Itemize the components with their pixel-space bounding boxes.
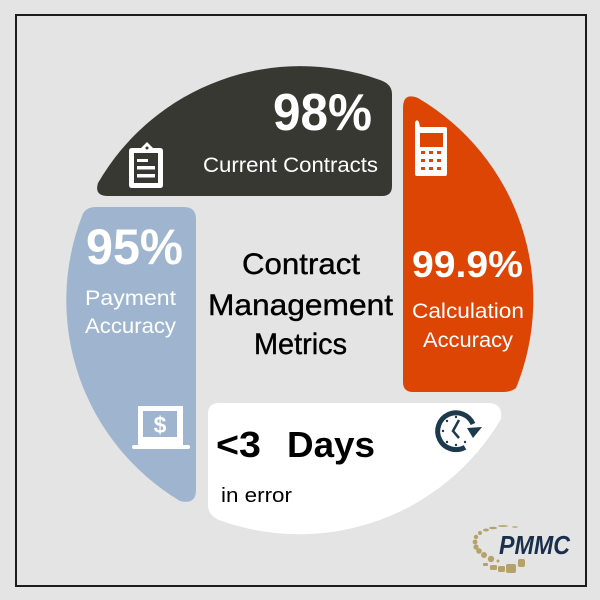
logo: PMMC: PMMC [499, 530, 571, 560]
panel: days in error [208, 403, 501, 534]
title [208, 248, 394, 361]
stat: less than 3 days: <3 [216, 424, 261, 465]
label: accuracy: Accuracy [423, 329, 514, 352]
stat: 99.9%: 99.9% [412, 244, 523, 285]
icon: mobile phone [415, 120, 447, 176]
stat: 98%: 98% [273, 84, 372, 142]
panel: payment accuracy [66, 207, 196, 502]
title: Contract [242, 248, 361, 281]
icon: laptop with dollar [132, 406, 190, 449]
title: Management [208, 289, 394, 322]
panel: current contracts [97, 66, 392, 196]
icon: clock with arrow [438, 413, 482, 450]
label: current contracts: Current Contracts [203, 154, 378, 177]
icon: clipboard [129, 142, 163, 188]
stat: 95%: 95% [86, 219, 183, 275]
panel: calculation accuracy [403, 96, 533, 392]
label: accuracy: Accuracy [85, 315, 177, 338]
label: calculation: Calculation [412, 300, 524, 323]
logo: PMMC [473, 525, 571, 573]
title: Metrics [254, 328, 347, 361]
label: payment: Payment [85, 287, 176, 310]
label: in error: in error [221, 485, 292, 507]
icon: laptop with dollar: $ [154, 412, 167, 438]
stat: less than 3 days [216, 424, 375, 465]
stat: less than 3 days: Days [287, 424, 375, 465]
